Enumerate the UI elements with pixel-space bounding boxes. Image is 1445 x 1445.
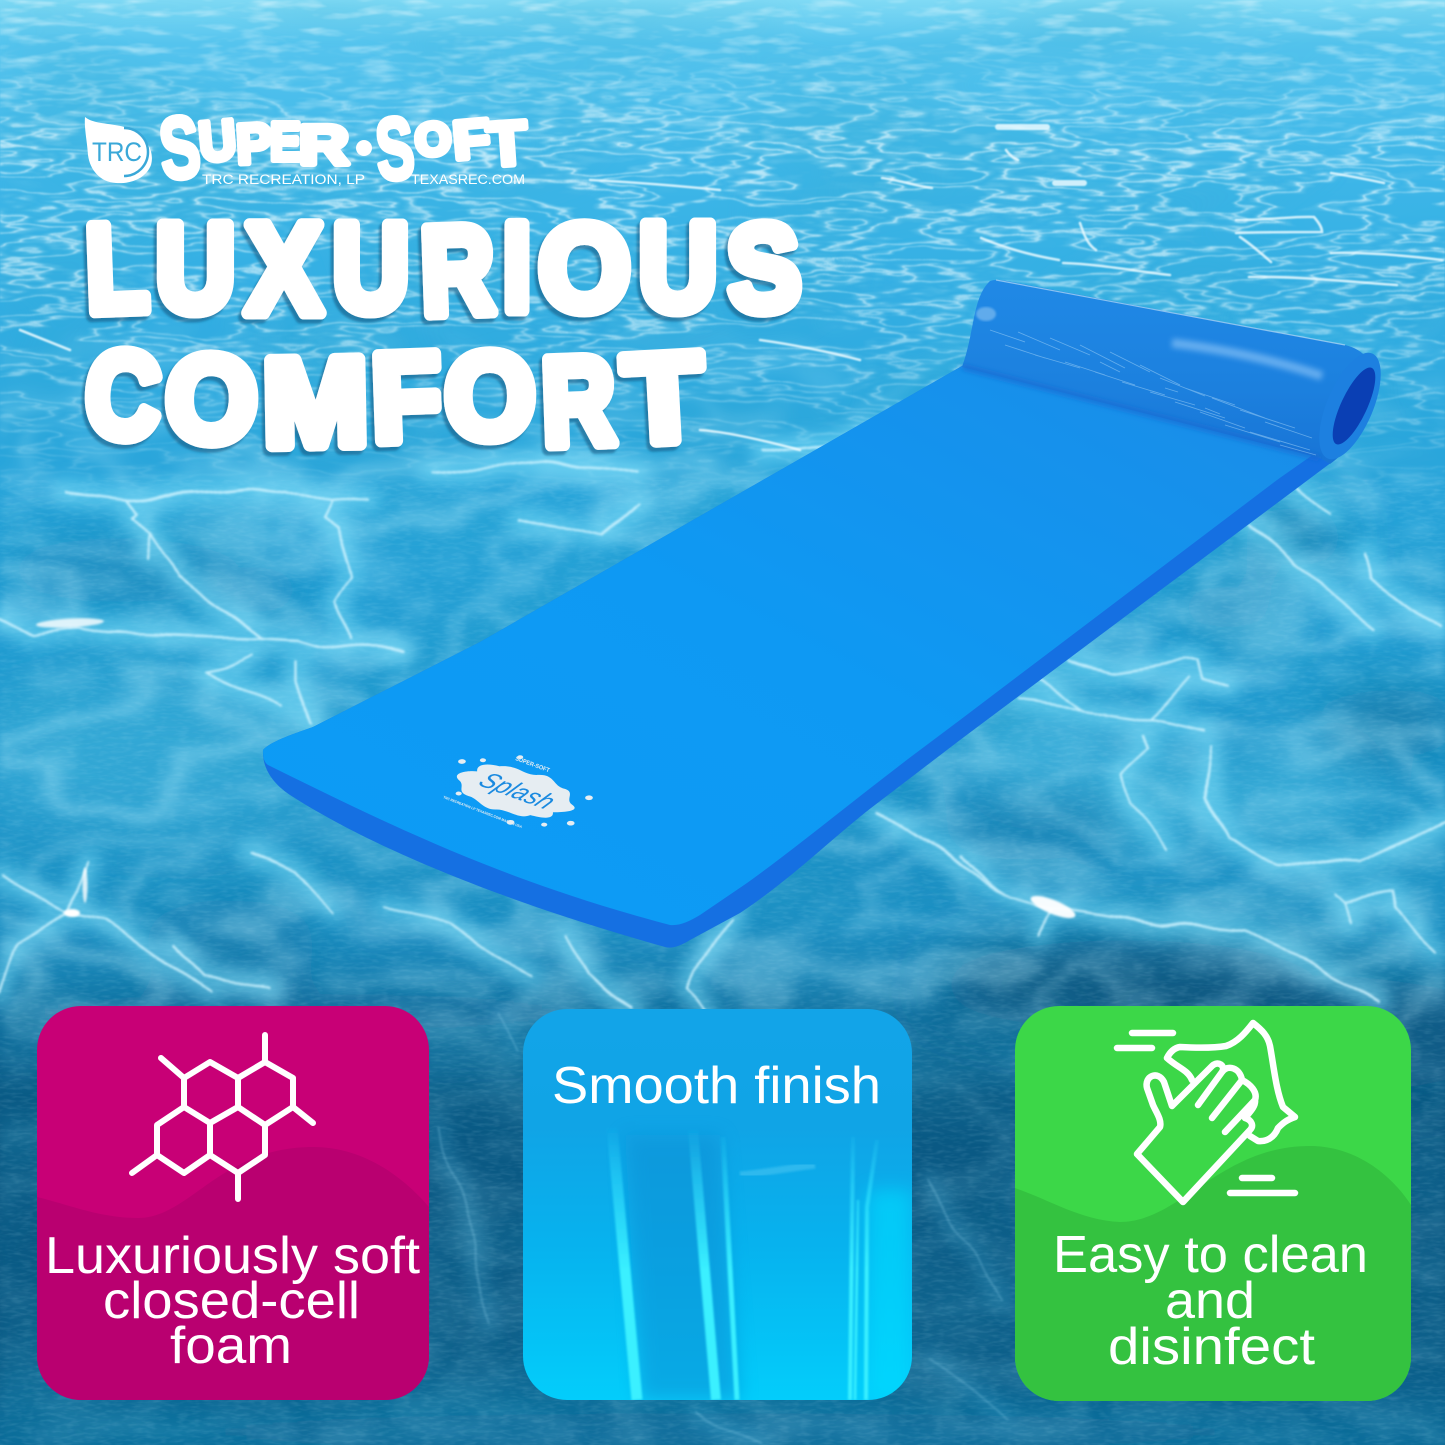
brand logo <box>85 96 530 199</box>
logo wordmark: P <box>235 111 274 176</box>
logo small heading: SUPER-SOFT <box>514 756 550 774</box>
logo wordmark: F <box>450 108 493 171</box>
panel: closed-cell foam: foam <box>170 1317 292 1375</box>
icon: honeycomb cells <box>132 1035 313 1199</box>
title line 1 <box>84 198 803 341</box>
logo wordmark: U <box>196 107 239 173</box>
title line 1: U <box>333 200 409 338</box>
logo wordmark: E <box>270 112 301 172</box>
title line 2: O <box>164 330 259 469</box>
title line 2: M <box>262 333 369 473</box>
title line 2: C <box>82 325 164 465</box>
title line 2: T <box>620 328 706 470</box>
title line 1: I <box>503 199 531 337</box>
title line 2 <box>82 325 706 473</box>
logo tagline left: TRC RECREATION, LP <box>202 172 365 187</box>
logo drop badge: TRC <box>92 137 142 167</box>
roll highlight <box>1172 343 1322 376</box>
panel text: Easy to clean <box>1053 1226 1368 1284</box>
roll end ring <box>1307 345 1393 467</box>
title line 1: S <box>724 198 803 338</box>
title line 1: L <box>84 199 150 339</box>
blue card background <box>523 1009 912 1400</box>
title line 2: R <box>540 332 617 472</box>
title line 2: F <box>370 328 443 468</box>
icon: hand wiping with cloth <box>1117 1023 1295 1202</box>
roll crease shadow <box>962 367 1320 458</box>
panel text: Luxuriously soft <box>45 1227 421 1285</box>
green card background <box>1015 1006 1411 1401</box>
logo wordmark: O <box>413 112 453 166</box>
logo wordmark: R <box>299 113 349 176</box>
splash logo on mat <box>425 740 611 842</box>
panel: easy to clean: and <box>1165 1272 1255 1330</box>
panel: closed-cell foam: closed-cell <box>103 1272 360 1330</box>
product: foam float mat <box>263 280 1393 948</box>
title line 1: O <box>539 200 630 336</box>
roll hole <box>1324 362 1384 450</box>
panel: easy to clean: disinfect <box>1108 1318 1316 1376</box>
title line 1: R <box>419 201 496 341</box>
logo fine print: TRC RECREATION LP TEXASREC.COM MADE IN USA <box>443 795 523 829</box>
mat top surface <box>263 366 1314 925</box>
panel: smooth finish <box>523 1009 912 1400</box>
logo drop badge <box>85 117 152 183</box>
logo wordmark: S <box>155 96 205 199</box>
title line 1: U <box>156 200 235 338</box>
logo wordmark <box>155 96 530 199</box>
pillow roll <box>962 280 1375 464</box>
title <box>82 198 803 473</box>
pink card background <box>37 1006 429 1400</box>
panel: closed-cell foam <box>37 1006 429 1400</box>
roll texture ripples <box>990 330 1316 455</box>
logo tagline right: TEXASREC.COM <box>411 172 525 187</box>
splash logo on mat: Splash <box>472 768 562 814</box>
title line 1: U <box>639 199 717 337</box>
panel: easy to clean <box>1015 1006 1411 1401</box>
logo wordmark: T <box>485 109 530 180</box>
mat thick edge <box>263 366 1332 948</box>
logo wordmark: S <box>372 98 418 199</box>
title line 1: X <box>246 198 322 341</box>
roll top edge highlight <box>996 280 1345 345</box>
title line 2: O <box>445 328 535 464</box>
panel text: Smooth finish <box>552 1057 881 1115</box>
